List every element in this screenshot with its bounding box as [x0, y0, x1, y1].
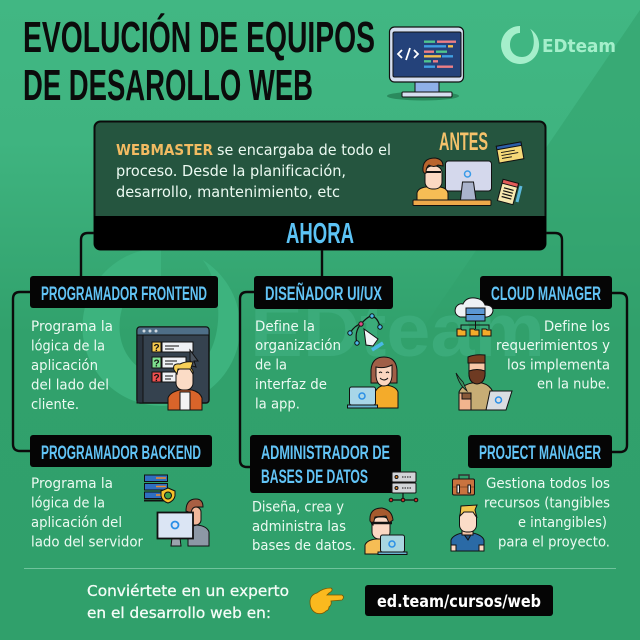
- project text: [484, 476, 610, 550]
- cloud heading: [480, 276, 612, 309]
- logo: EDteam: [501, 26, 616, 64]
- backend heading: [30, 435, 212, 467]
- panel: webmaster / antes: [94, 122, 546, 250]
- icon: database administrator: [365, 472, 418, 554]
- panel: administrador de bases de datos: [250, 435, 418, 554]
- ahora band: AHORA: [286, 218, 354, 250]
- cloud text: los implementa: [507, 358, 610, 374]
- database text: [252, 500, 356, 554]
- database heading: ADMINISTRADOR DE: [261, 442, 390, 464]
- backend text: Programa la: [31, 476, 113, 492]
- icon: webmaster at desk: [413, 142, 524, 206]
- icon: backend developer: [144, 475, 209, 546]
- database text: administra las: [252, 519, 346, 535]
- call to action text: Conviértete en un experto: [87, 582, 289, 600]
- call to action text: en el desarrollo web en:: [87, 604, 271, 622]
- backend heading: PROGRAMADOR BACKEND: [41, 442, 201, 464]
- database text: bases de datos.: [252, 538, 356, 554]
- designer heading: DISEÑADOR UI/UX: [265, 282, 382, 305]
- database heading: BASES DE DATOS: [261, 466, 368, 488]
- frontend text: [31, 319, 113, 413]
- project heading: [468, 435, 612, 468]
- designer text: [255, 319, 341, 412]
- project text: para el proyecto.: [498, 534, 610, 550]
- button: course link: ed.team/cursos/web: [377, 592, 541, 612]
- title: DE DESAROLLO WEB: [23, 62, 313, 110]
- connector lines: [13, 233, 627, 467]
- icon: pointing hand: [310, 588, 344, 614]
- antes label: ANTES: [439, 129, 488, 156]
- webmaster text: se encargaba de todo el: [217, 141, 391, 159]
- backend text: lado del servidor: [31, 534, 143, 550]
- database text: Diseña, crea y: [252, 500, 344, 516]
- icon: frontend developer: ?: [154, 373, 160, 384]
- watermark: EDteam logo: EDteam: [250, 288, 545, 372]
- ahora band: [94, 216, 546, 250]
- icon: project manager: [451, 505, 484, 551]
- title: [23, 12, 375, 110]
- icon: code monitor: [387, 27, 464, 100]
- backend text: [31, 476, 143, 550]
- webmaster text: desarrollo, mantenimiento, etc: [116, 183, 340, 201]
- designer text: organización: [255, 338, 341, 354]
- designer heading: [254, 276, 393, 309]
- designer text: interfaz de: [255, 377, 327, 393]
- webmaster text: WEBMASTER: [116, 141, 213, 159]
- panel: cloud manager: [455, 276, 612, 410]
- panel: programador frontend: [30, 276, 218, 413]
- panel: programador backend: [30, 435, 212, 550]
- cloud text: en la nube.: [537, 376, 610, 392]
- frontend text: Programa la: [31, 319, 113, 335]
- project text: e intangibles): [518, 515, 607, 531]
- frontend text: cliente.: [31, 397, 79, 413]
- icon: frontend developer: ?: [154, 358, 160, 370]
- backend text: aplicación del: [31, 515, 122, 531]
- icon: frontend developer: [137, 327, 209, 410]
- designer text: la app.: [255, 396, 300, 412]
- frontend heading: PROGRAMADOR FRONTEND: [41, 283, 207, 305]
- watermark: EDteam logo: [82, 248, 545, 406]
- icon: cloud manager: [455, 298, 512, 410]
- webmaster text: [116, 141, 391, 201]
- divider: [24, 568, 616, 569]
- icon: frontend developer: ?: [154, 343, 160, 354]
- cloud text: Define los: [544, 319, 610, 335]
- backend text: lógica de la: [31, 496, 105, 512]
- frontend heading: [30, 276, 218, 308]
- cloud text: [496, 319, 610, 392]
- frontend text: lógica de la: [31, 338, 105, 354]
- title: EVOLUCIÓN DE EQUIPOS: [23, 12, 375, 62]
- project text: Gestiona todos los: [486, 476, 610, 492]
- designer text: de la: [255, 358, 287, 374]
- webmaster text: proceso. Desde la planificación,: [116, 162, 346, 180]
- logo: EDteam: EDteam: [542, 37, 616, 57]
- database heading: [250, 435, 401, 493]
- frontend text: del lado del: [31, 378, 109, 394]
- cloud text: requerimientos y: [496, 338, 610, 354]
- icon: designer: [348, 314, 398, 408]
- panel: diseñador ui/ux: [254, 276, 398, 412]
- designer text: Define la: [255, 319, 315, 335]
- call to action text: [87, 582, 289, 622]
- project text: recursos (tangibles: [484, 496, 610, 512]
- button: course link: [365, 585, 553, 616]
- panel: project manager: [451, 435, 612, 551]
- frontend text: aplicación: [31, 358, 98, 374]
- icon: briefcase: [452, 475, 474, 495]
